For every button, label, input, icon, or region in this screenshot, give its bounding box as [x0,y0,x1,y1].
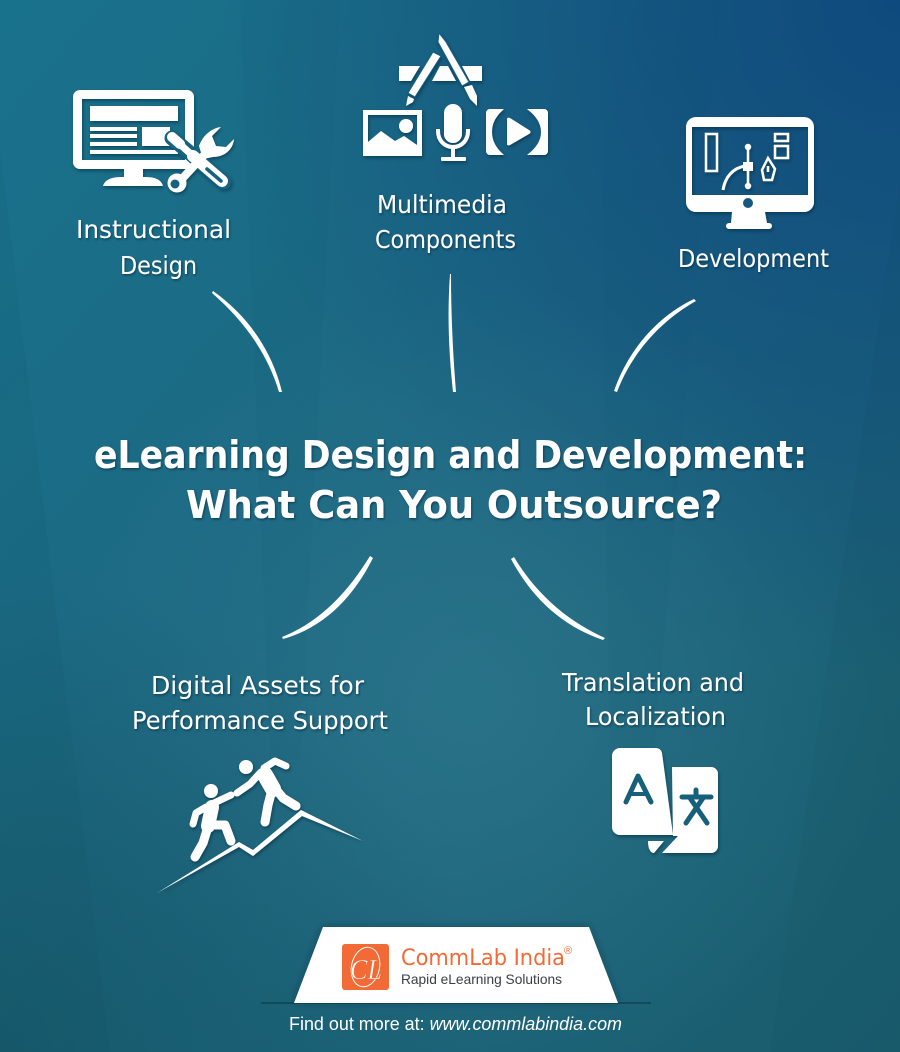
title [94,433,807,527]
icon: translation cards [612,748,718,853]
label: Digital Assets for Performance Support: Digital Assets for [151,671,365,700]
footer divider [261,1002,651,1004]
logo mark: CL [350,955,382,986]
label: Translation and Localization [561,668,744,731]
registered mark: ® [564,945,572,957]
label: Instructional Design: Instructional [76,215,231,244]
logo panel [294,927,618,1003]
icon: monitor with tools [73,90,234,192]
connector: Translation [511,557,605,640]
icon: development monitor [686,117,814,229]
label: Multimedia Components [375,190,516,254]
title: What Can You Outsource? [186,483,722,527]
connector: Multimedia Components [449,274,456,392]
logo mark [342,944,389,990]
label: Instructional Design [76,215,231,280]
label: Digital Assets for Performance Support [132,671,388,735]
label: Multimedia Components: Components [375,225,516,254]
connector: Development [614,299,696,392]
title: eLearning Design and Development: [94,433,807,477]
connector: Instructional Design [212,291,282,392]
label: Development: Development [678,244,829,273]
footer link: Find out more at: www.commlabindia.com [289,1014,622,1034]
brand name: CommLab India [401,946,565,971]
connector: Digital Assets [282,556,373,639]
label: Multimedia Components: Multimedia [377,190,507,219]
tagline: Rapid eLearning Solutions [401,971,562,987]
icon: climbers helping each other [157,760,363,893]
label: Instructional Design: Design [120,251,197,280]
label: Digital Assets for Performance Support: Performance Support [132,706,388,735]
label: Translation and Localization: Localization [585,702,726,731]
icon: multimedia tools [363,33,548,161]
label: Translation and Localization: Translation and [561,668,744,697]
